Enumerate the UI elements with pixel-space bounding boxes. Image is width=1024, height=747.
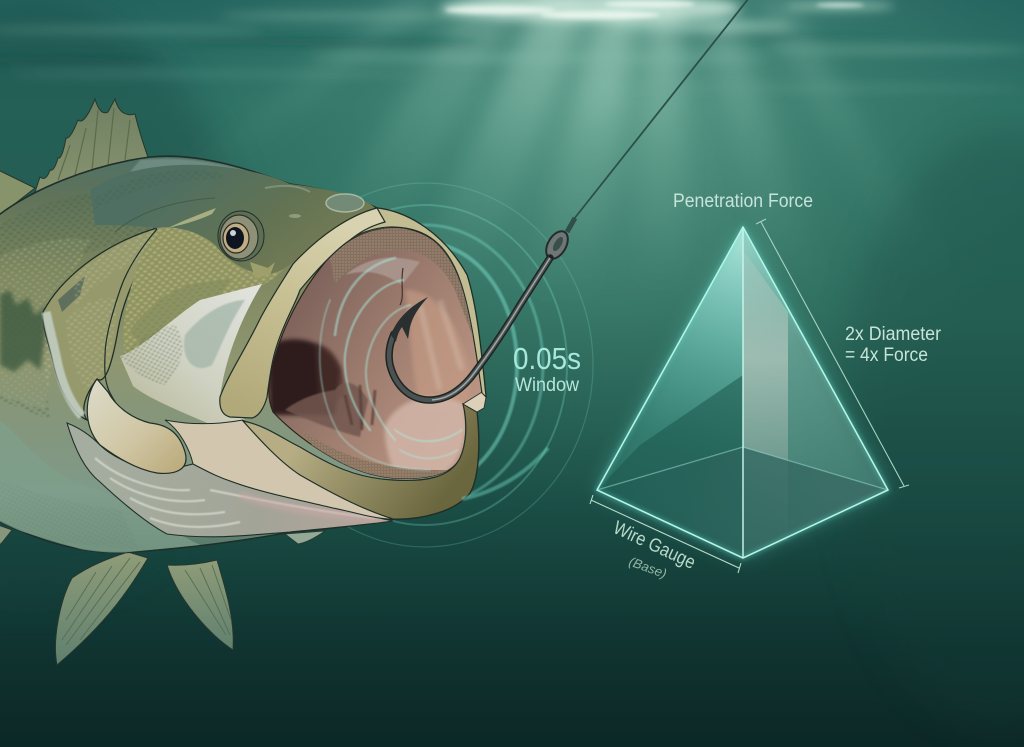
ventral fin two <box>167 560 233 650</box>
white cheek <box>105 229 262 438</box>
mouth interior <box>268 227 482 480</box>
pyramid base <box>597 447 888 558</box>
label: 4x force: = 4x Force <box>845 345 928 366</box>
chin tip <box>463 392 486 412</box>
dimension: wire gauge base <box>590 495 741 573</box>
sonar ripple lower bright arc <box>462 448 548 499</box>
belly fin <box>285 531 325 544</box>
label: window: Window <box>515 375 579 396</box>
pyramid: penetration force <box>597 227 888 558</box>
flank scales and head <box>90 165 377 360</box>
label: 0.05s: 0.05s <box>513 341 581 376</box>
gill membrane <box>67 423 393 537</box>
label: wire gauge: Wire Gauge <box>610 517 699 574</box>
sonar ripples outside mouth <box>257 183 593 547</box>
dimension: side length <box>756 219 909 488</box>
body markings <box>0 159 270 555</box>
upper lip rim <box>333 208 486 397</box>
vertical band <box>743 250 788 558</box>
gill cover <box>43 228 157 420</box>
bass fish <box>0 99 486 665</box>
label: base: (Base) <box>627 554 669 581</box>
dorsal fin <box>35 99 149 192</box>
maxilla upper jaw <box>220 208 385 418</box>
ventral fin one <box>55 552 148 665</box>
body <box>0 156 486 553</box>
left face shadow <box>597 375 743 558</box>
right face <box>743 227 888 558</box>
light rays <box>130 0 960 330</box>
pyramid glow <box>597 227 888 558</box>
rear dorsal fin <box>0 170 35 217</box>
throat patch <box>87 379 186 473</box>
label: 2x diameter: 2x Diameter <box>845 324 942 345</box>
label: penetration force: Penetration Force <box>673 191 813 212</box>
ripples inside mouth <box>320 258 462 470</box>
eye <box>218 211 264 261</box>
water surface shimmer <box>0 0 1024 92</box>
fishing line <box>570 0 749 224</box>
fishing hook <box>389 218 575 400</box>
lower left fin stub <box>0 525 12 545</box>
left face <box>597 227 743 558</box>
pectoral fin <box>0 400 68 497</box>
pyramid edges <box>597 227 888 558</box>
cream lower jaw skin <box>165 420 397 519</box>
lower jaw lip <box>243 404 479 519</box>
